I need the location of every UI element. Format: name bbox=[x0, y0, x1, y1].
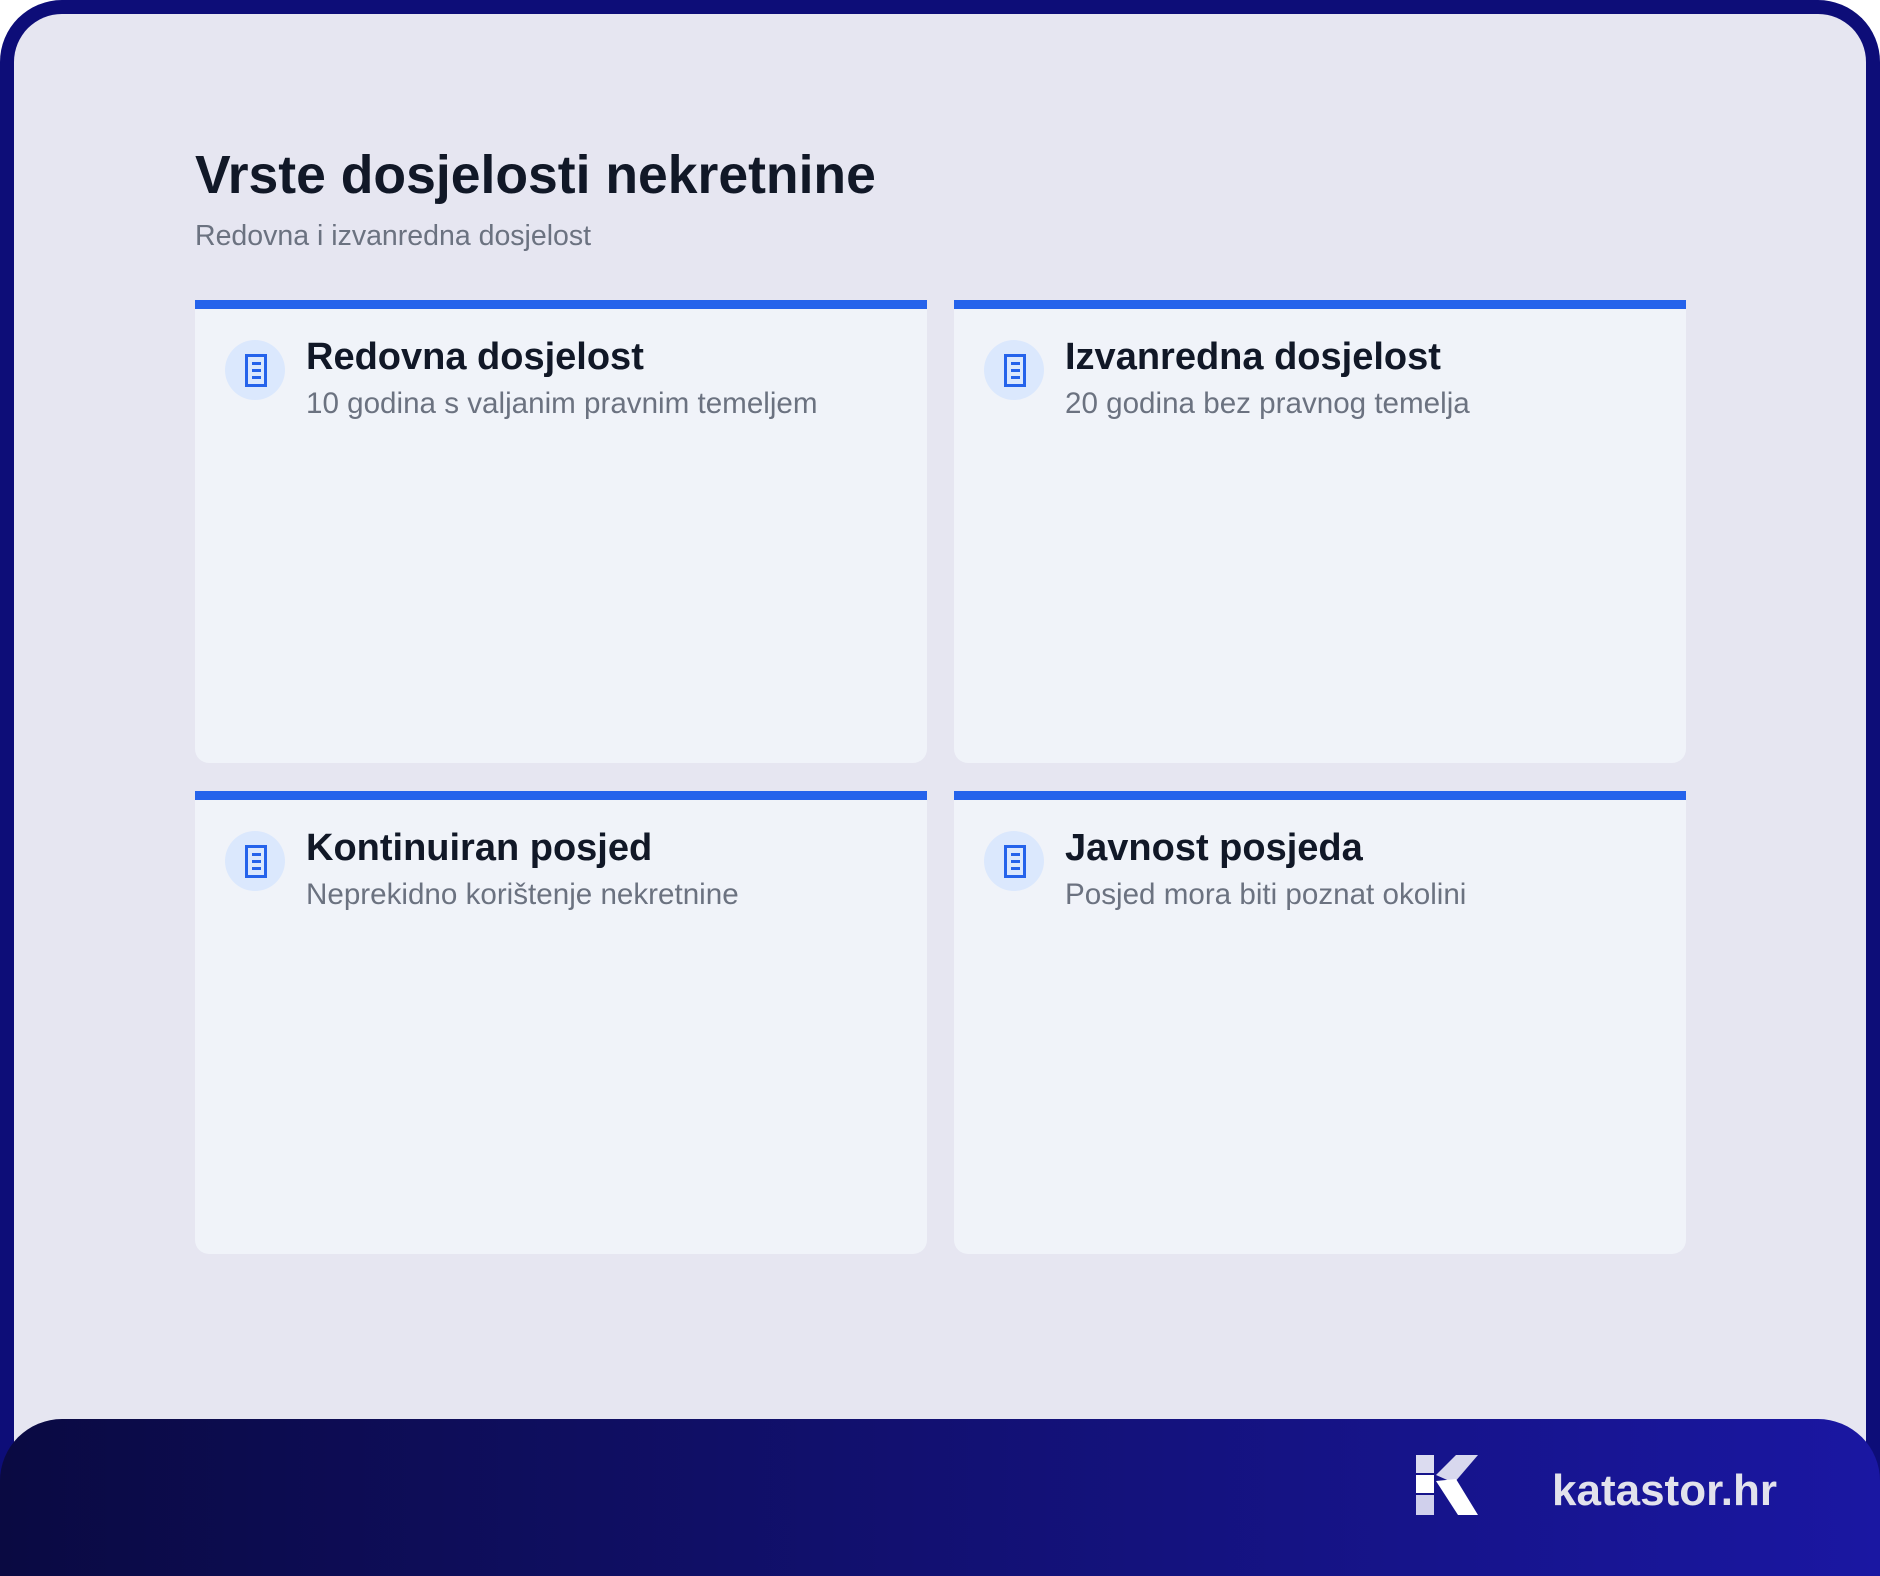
icon: document bbox=[225, 831, 285, 891]
text: 10 godina s valjanim pravnim temeljem bbox=[306, 387, 818, 420]
text: Posjed mora biti poznat okolini bbox=[1065, 878, 1466, 911]
icon: document bbox=[984, 340, 1044, 400]
panel: redovna bbox=[195, 300, 927, 763]
title: Vrste dosjelosti nekretnine bbox=[195, 146, 876, 205]
icon: document bbox=[984, 831, 1044, 891]
panel: kontinuiran bbox=[195, 791, 927, 1254]
heading: Kontinuiran posjed bbox=[306, 827, 652, 869]
heading: Izvanredna dosjelost bbox=[1065, 336, 1441, 378]
icon: logo K bbox=[1416, 1455, 1478, 1515]
text: 20 godina bez pravnog temelja bbox=[1065, 387, 1470, 420]
icon: document bbox=[225, 340, 285, 400]
heading: Redovna dosjelost bbox=[306, 336, 644, 378]
panel: izvanredna bbox=[954, 300, 1686, 763]
footer bbox=[0, 1419, 1880, 1576]
subtitle: Redovna i izvanredna dosjelost bbox=[195, 220, 591, 252]
heading: Javnost posjeda bbox=[1065, 827, 1363, 869]
text: Neprekidno korištenje nekretnine bbox=[306, 878, 739, 911]
panel: javnost bbox=[954, 791, 1686, 1254]
brand text: katastor.hr bbox=[1552, 1466, 1777, 1515]
